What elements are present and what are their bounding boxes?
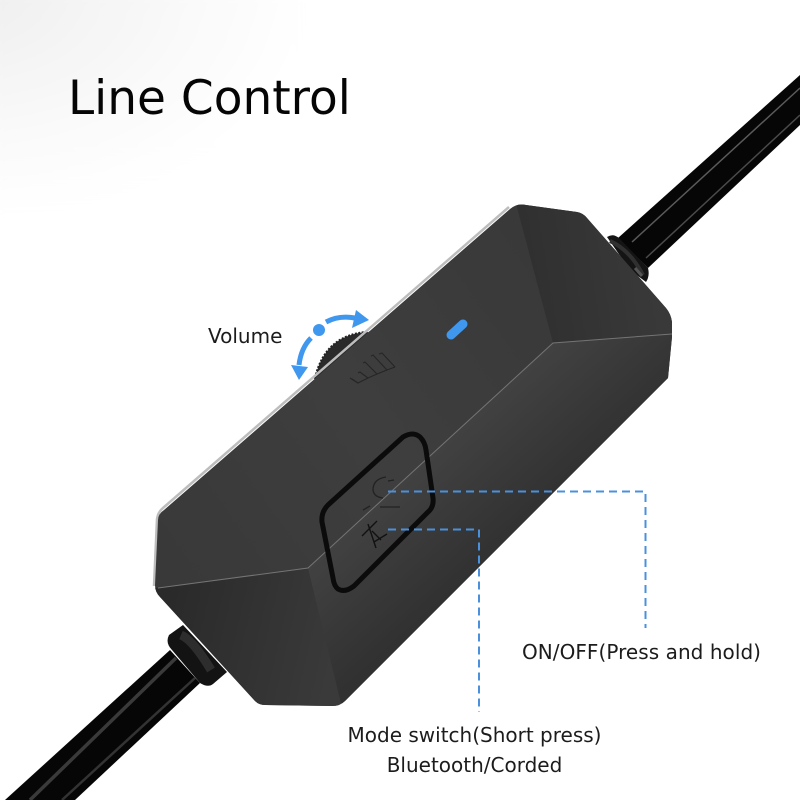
control body	[155, 204, 672, 706]
cable: upper right	[618, 75, 800, 268]
volume arrow icon	[291, 310, 369, 380]
body: right face	[516, 204, 672, 342]
label: mode switch	[348, 723, 601, 777]
label: mode switch: Bluetooth/Corded	[387, 753, 562, 777]
body: lower left face	[155, 574, 340, 706]
button	[322, 434, 433, 590]
leader line: on/off	[388, 492, 646, 628]
mode M icon on button	[362, 521, 387, 548]
strain relief: lower left	[168, 625, 227, 686]
body: ridge lines	[158, 334, 672, 588]
volume scale marks	[350, 353, 395, 383]
volume wheel	[315, 332, 372, 385]
leader line: mode switch	[388, 530, 479, 712]
title: Line Control	[68, 71, 351, 126]
body: upper face	[155, 204, 672, 706]
indicator LED	[451, 324, 463, 335]
label: on/off: ON/OFF(Press and hold)	[522, 640, 761, 664]
body: lower face	[337, 337, 672, 706]
label: mode switch: Mode switch(Short press)	[348, 723, 601, 747]
strain relief: upper right	[607, 235, 649, 282]
label: volume: Volume	[208, 324, 282, 348]
body edge highlight	[154, 207, 509, 586]
background haze	[0, 0, 360, 210]
power icon on button	[363, 477, 400, 510]
cable: lower left	[5, 650, 200, 800]
